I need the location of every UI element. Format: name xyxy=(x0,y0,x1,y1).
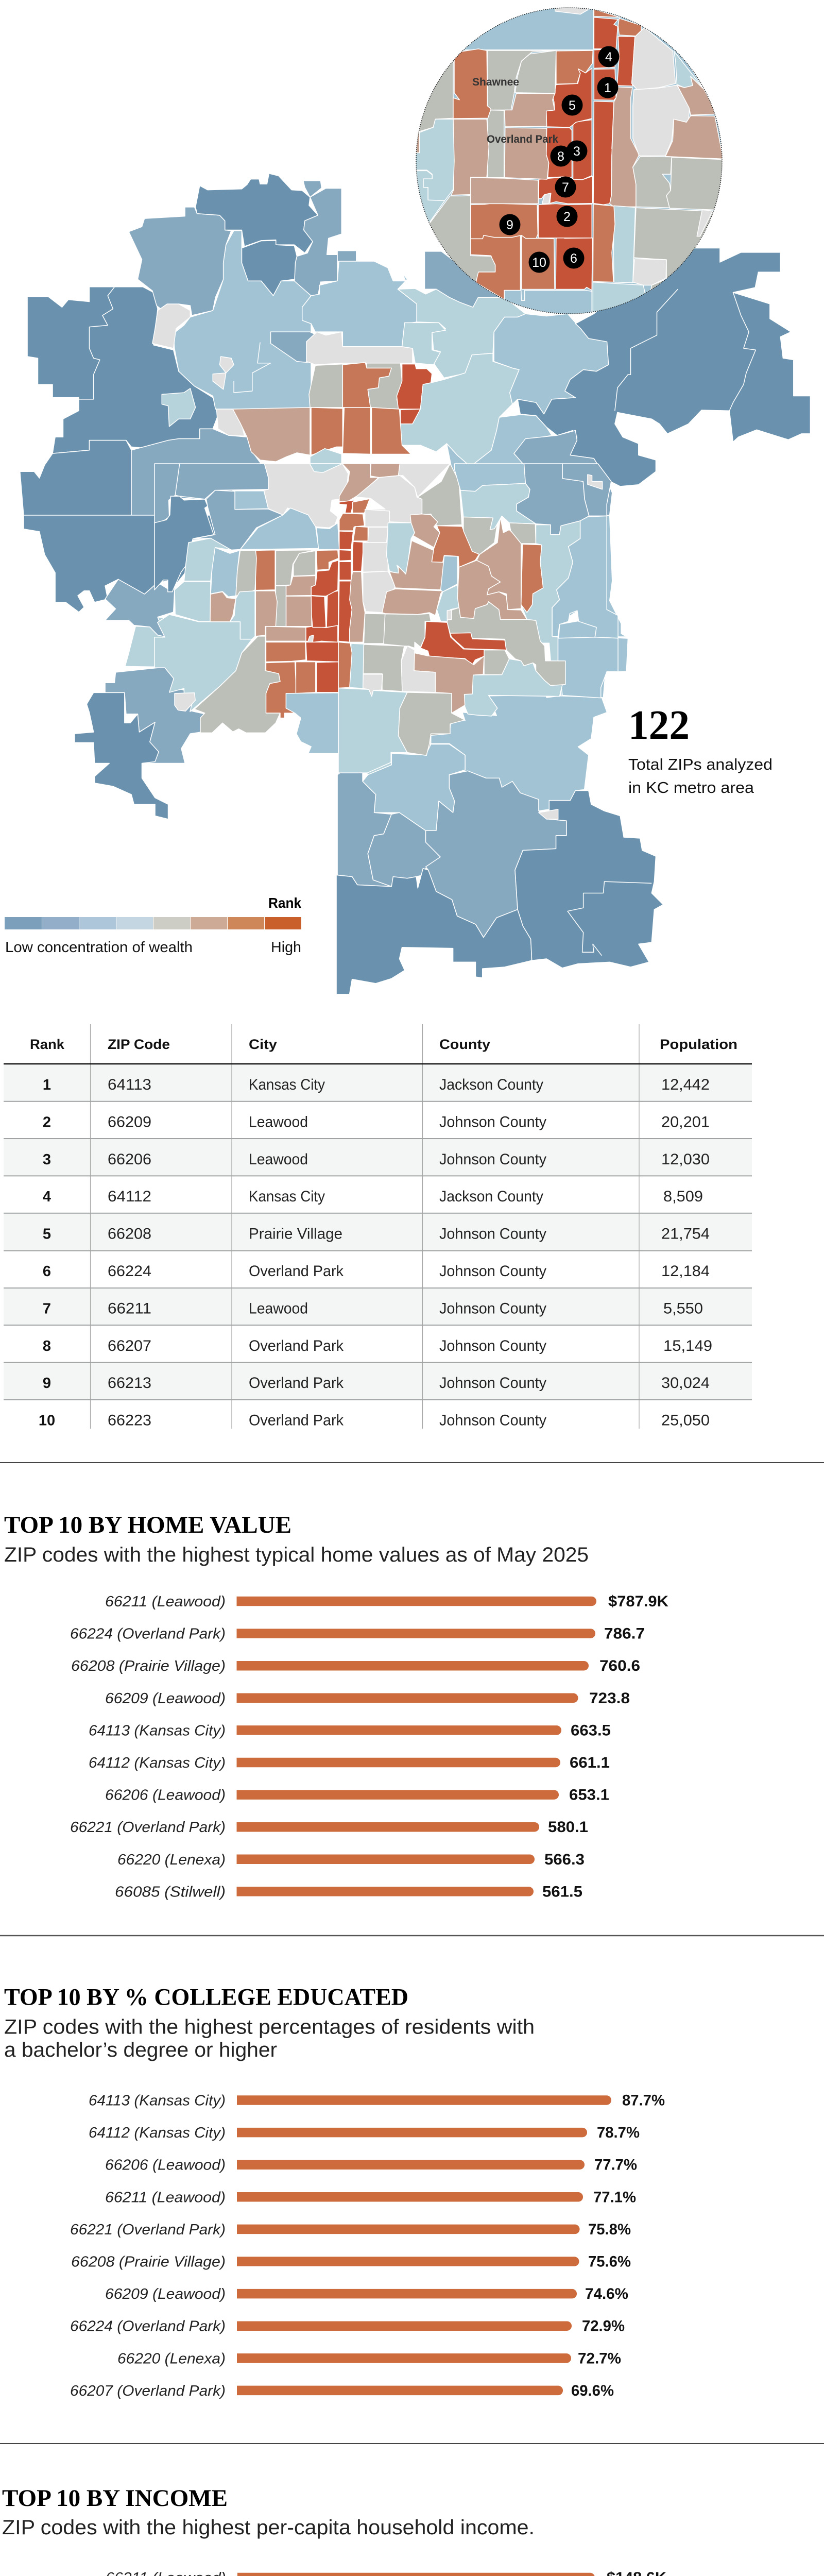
inset: city labels: Shawnee xyxy=(472,76,519,88)
table row 5 xyxy=(43,1226,710,1243)
table row 10 xyxy=(39,1412,710,1429)
callout: total ZIPs analyzed: Total ZIPs analyzed xyxy=(628,755,772,773)
legend: rank colour scale: Low concentration of wealth xyxy=(5,939,193,956)
bar chart: home value: 66211 (Leawood) xyxy=(105,1594,226,1610)
bar chart: college educated xyxy=(70,2092,665,2399)
table row 7: Johnson County xyxy=(439,1300,546,1317)
table row 8: 8 xyxy=(43,1338,51,1354)
choropleth map of Kansas City metro ZIP codes xyxy=(20,0,810,994)
subtitle: home value: ZIP codes with the highest typical home values as of May 2025 xyxy=(4,1544,589,1566)
table row 6: Johnson County xyxy=(439,1263,546,1280)
bar chart: college educated: 69.6% xyxy=(571,2382,614,2399)
table header: Population xyxy=(660,1037,737,1052)
inset: numbered rank markers: 9 xyxy=(506,218,513,232)
table row 8: Overland Park xyxy=(249,1337,344,1354)
bar chart: college educated: 66211 (Leawood) xyxy=(105,2189,226,2206)
table row 3: 66206 xyxy=(108,1151,151,1168)
bar chart: income xyxy=(71,2569,666,2576)
table row 8: 15,149 xyxy=(663,1337,712,1354)
bar chart: home value: 66220 (Lenexa) xyxy=(117,1852,226,1868)
table row 6 xyxy=(43,1263,710,1280)
table header: Rank xyxy=(30,1037,65,1052)
heading: home value: TOP 10 BY HOME VALUE xyxy=(4,1512,291,1538)
table row 4 xyxy=(43,1188,703,1205)
table row 8: Johnson County xyxy=(439,1337,546,1354)
table row 1: Jackson County xyxy=(439,1076,543,1093)
table row 10: Overland Park xyxy=(249,1412,344,1429)
bar chart: home value: 66209 (Leawood) xyxy=(105,1690,226,1707)
table row 10: Johnson County xyxy=(439,1412,546,1429)
bar chart: home value: 66221 (Overland Park) xyxy=(70,1819,226,1836)
panel: top 10 by income xyxy=(2,2485,666,2576)
bar chart: college educated: 77.7% xyxy=(594,2157,637,2174)
bar chart: college educated: 66220 (Lenexa) xyxy=(117,2350,226,2367)
bar chart: college educated: 77.1% xyxy=(593,2189,636,2206)
table row 9: 30,024 xyxy=(661,1375,710,1392)
table row 6: 6 xyxy=(43,1263,51,1280)
bar chart: college educated: 87.7% xyxy=(622,2092,665,2109)
table row 5: 21,754 xyxy=(661,1226,710,1243)
table row 4: 4 xyxy=(43,1189,51,1205)
table row 3: 12,030 xyxy=(661,1151,710,1168)
heading: income: TOP 10 BY INCOME xyxy=(2,2485,228,2512)
table row 3: Johnson County xyxy=(439,1151,546,1168)
table header xyxy=(30,1037,737,1052)
bar chart: home value: 653.1 xyxy=(569,1787,609,1804)
table row 10: 66223 xyxy=(108,1412,151,1429)
bar chart: home value: 723.8 xyxy=(589,1690,630,1707)
bar chart: home value: 66208 (Prairie Village) xyxy=(71,1658,226,1674)
bar chart: home value: $787.9K xyxy=(608,1593,668,1610)
bar chart: home value: 580.1 xyxy=(548,1819,588,1836)
table row 2: Leawood xyxy=(249,1113,308,1130)
bar chart: home value: 566.3 xyxy=(544,1851,585,1868)
table row 9: 66213 xyxy=(108,1375,151,1392)
bar chart: home value: 66224 (Overland Park) xyxy=(70,1626,226,1642)
table row 3: 3 xyxy=(43,1151,51,1168)
bar chart: college educated: 66206 (Leawood) xyxy=(105,2157,226,2174)
legend: rank colour scale xyxy=(5,895,301,956)
table header: City xyxy=(249,1037,277,1052)
bar chart: college educated: 72.9% xyxy=(582,2318,625,2335)
table row 5: Johnson County xyxy=(439,1226,546,1243)
inset: numbered rank markers: 5 xyxy=(569,98,576,113)
table row 8 xyxy=(43,1337,712,1354)
bar chart: home value: 760.6 xyxy=(599,1657,640,1674)
table row 2: Johnson County xyxy=(439,1113,546,1130)
callout: total ZIPs analyzed xyxy=(628,702,772,796)
bar chart: college educated: 64112 (Kansas City) xyxy=(89,2125,226,2141)
inset: numbered rank markers: 10 xyxy=(532,256,546,270)
subtitle: income: ZIP codes with the highest per-capita household income. xyxy=(2,2516,535,2539)
bar chart: home value: 66206 (Leawood) xyxy=(105,1787,226,1804)
table row 1: Kansas City xyxy=(249,1076,325,1093)
heading: college educated: TOP 10 BY % COLLEGE EDUCATED xyxy=(4,1984,408,2011)
table row 4: Kansas City xyxy=(249,1188,325,1205)
bar chart: home value xyxy=(70,1593,668,1900)
bar chart: home value: 561.5 xyxy=(542,1883,582,1900)
map: central metro ZIPs xyxy=(154,464,618,773)
map: southern and western ZIPs xyxy=(24,515,663,994)
map: northern and western ZIPs xyxy=(20,174,810,515)
table row 10: 25,050 xyxy=(661,1412,710,1429)
table row 4: Jackson County xyxy=(439,1188,543,1205)
inset: numbered rank markers: 8 xyxy=(557,149,564,164)
subtitle: college educated xyxy=(4,2016,535,2061)
table row 2: 20,201 xyxy=(661,1113,710,1130)
bar chart: home value: 66085 (Stilwell) xyxy=(115,1884,226,1900)
bar chart: home value: 661.1 xyxy=(570,1754,610,1771)
bar chart: home value: 64112 (Kansas City) xyxy=(89,1755,226,1771)
table row 5: Prairie Village xyxy=(249,1226,342,1243)
table header: ZIP Code xyxy=(108,1037,170,1052)
panel: top 10 by home value xyxy=(4,1512,668,1900)
bar chart: college educated: 64113 (Kansas City) xyxy=(89,2093,226,2109)
table row 3 xyxy=(43,1151,710,1168)
table row 7: Leawood xyxy=(249,1300,308,1317)
bar chart: college educated: 66224 (Overland Park) xyxy=(70,2318,226,2335)
table header: County xyxy=(439,1037,490,1052)
callout: total ZIPs analyzed: in KC metro area xyxy=(628,778,754,796)
bar chart: college educated: 74.6% xyxy=(585,2285,628,2302)
panel: top 10 by percent college educated xyxy=(4,1984,665,2399)
bar chart: college educated: 66208 (Prairie Village) xyxy=(71,2253,226,2270)
table row 1: 12,442 xyxy=(661,1076,710,1093)
table row 9 xyxy=(43,1375,710,1392)
inset: numbered rank markers: 1 xyxy=(604,81,611,95)
table row 6: 66224 xyxy=(108,1263,151,1280)
table row 8: 66207 xyxy=(108,1337,151,1354)
subtitle: college educated: a bachelor’s degree or higher xyxy=(4,2039,277,2061)
table row 2: 66209 xyxy=(108,1113,151,1130)
table row 9: Overland Park xyxy=(249,1375,344,1392)
table row 1: 64113 xyxy=(108,1076,151,1093)
table row 7 xyxy=(43,1300,703,1317)
inset: numbered rank markers xyxy=(500,46,619,273)
table row 10: 10 xyxy=(39,1413,55,1429)
table row 3: Leawood xyxy=(249,1151,308,1168)
table row 2: 2 xyxy=(43,1114,51,1130)
inset: zoomed lens on top ZIPs xyxy=(416,8,722,314)
table row 7: 5,550 xyxy=(663,1300,703,1317)
inset: numbered rank markers: 3 xyxy=(573,144,580,159)
table row 5: 66208 xyxy=(108,1226,151,1243)
table row 1: 1 xyxy=(43,1077,51,1093)
inset: city labels: Overland Park xyxy=(487,133,558,145)
inset: city labels xyxy=(472,76,558,145)
bar chart: college educated: 66207 (Overland Park) xyxy=(70,2383,226,2399)
bar chart: college educated: 66221 (Overland Park) xyxy=(70,2222,226,2238)
callout: total ZIPs analyzed: 122 xyxy=(628,702,690,748)
table row 6: 12,184 xyxy=(661,1263,710,1280)
inset: numbered rank markers: 2 xyxy=(563,210,571,224)
table row 4: 64112 xyxy=(108,1188,151,1205)
table row 2 xyxy=(43,1113,710,1130)
table row 6: Overland Park xyxy=(249,1263,344,1280)
table row 1 xyxy=(43,1076,710,1093)
table row 7: 66211 xyxy=(108,1300,151,1317)
bar chart: home value: 663.5 xyxy=(571,1722,611,1739)
bar chart: college educated: 72.7% xyxy=(578,2350,621,2367)
table row 4: 8,509 xyxy=(663,1188,703,1205)
table row 9: 9 xyxy=(43,1375,51,1392)
inset: numbered rank markers: 7 xyxy=(562,180,569,195)
bar chart: college educated: 75.6% xyxy=(588,2253,631,2270)
table row 9: Johnson County xyxy=(439,1375,546,1392)
inset: numbered rank markers: 6 xyxy=(570,251,577,266)
table row 5: 5 xyxy=(43,1226,51,1243)
subtitle: college educated: ZIP codes with the highest percentages of residents with xyxy=(4,2016,535,2039)
table: top 10 ZIP codes by rank xyxy=(4,1024,752,1429)
bar chart: home value: 64113 (Kansas City) xyxy=(89,1722,226,1739)
table row 7: 7 xyxy=(43,1300,51,1317)
bar chart: college educated: 66209 (Leawood) xyxy=(105,2286,226,2302)
bar chart: college educated: 75.8% xyxy=(588,2221,631,2238)
bar chart: college educated: 78.7% xyxy=(597,2124,640,2141)
bar chart: home value: 786.7 xyxy=(604,1625,645,1642)
inset: numbered rank markers: 4 xyxy=(605,50,612,64)
inset: dotted lens outline xyxy=(416,8,722,314)
legend: rank colour scale: Rank xyxy=(268,895,301,911)
legend: rank colour scale: High xyxy=(271,939,301,956)
